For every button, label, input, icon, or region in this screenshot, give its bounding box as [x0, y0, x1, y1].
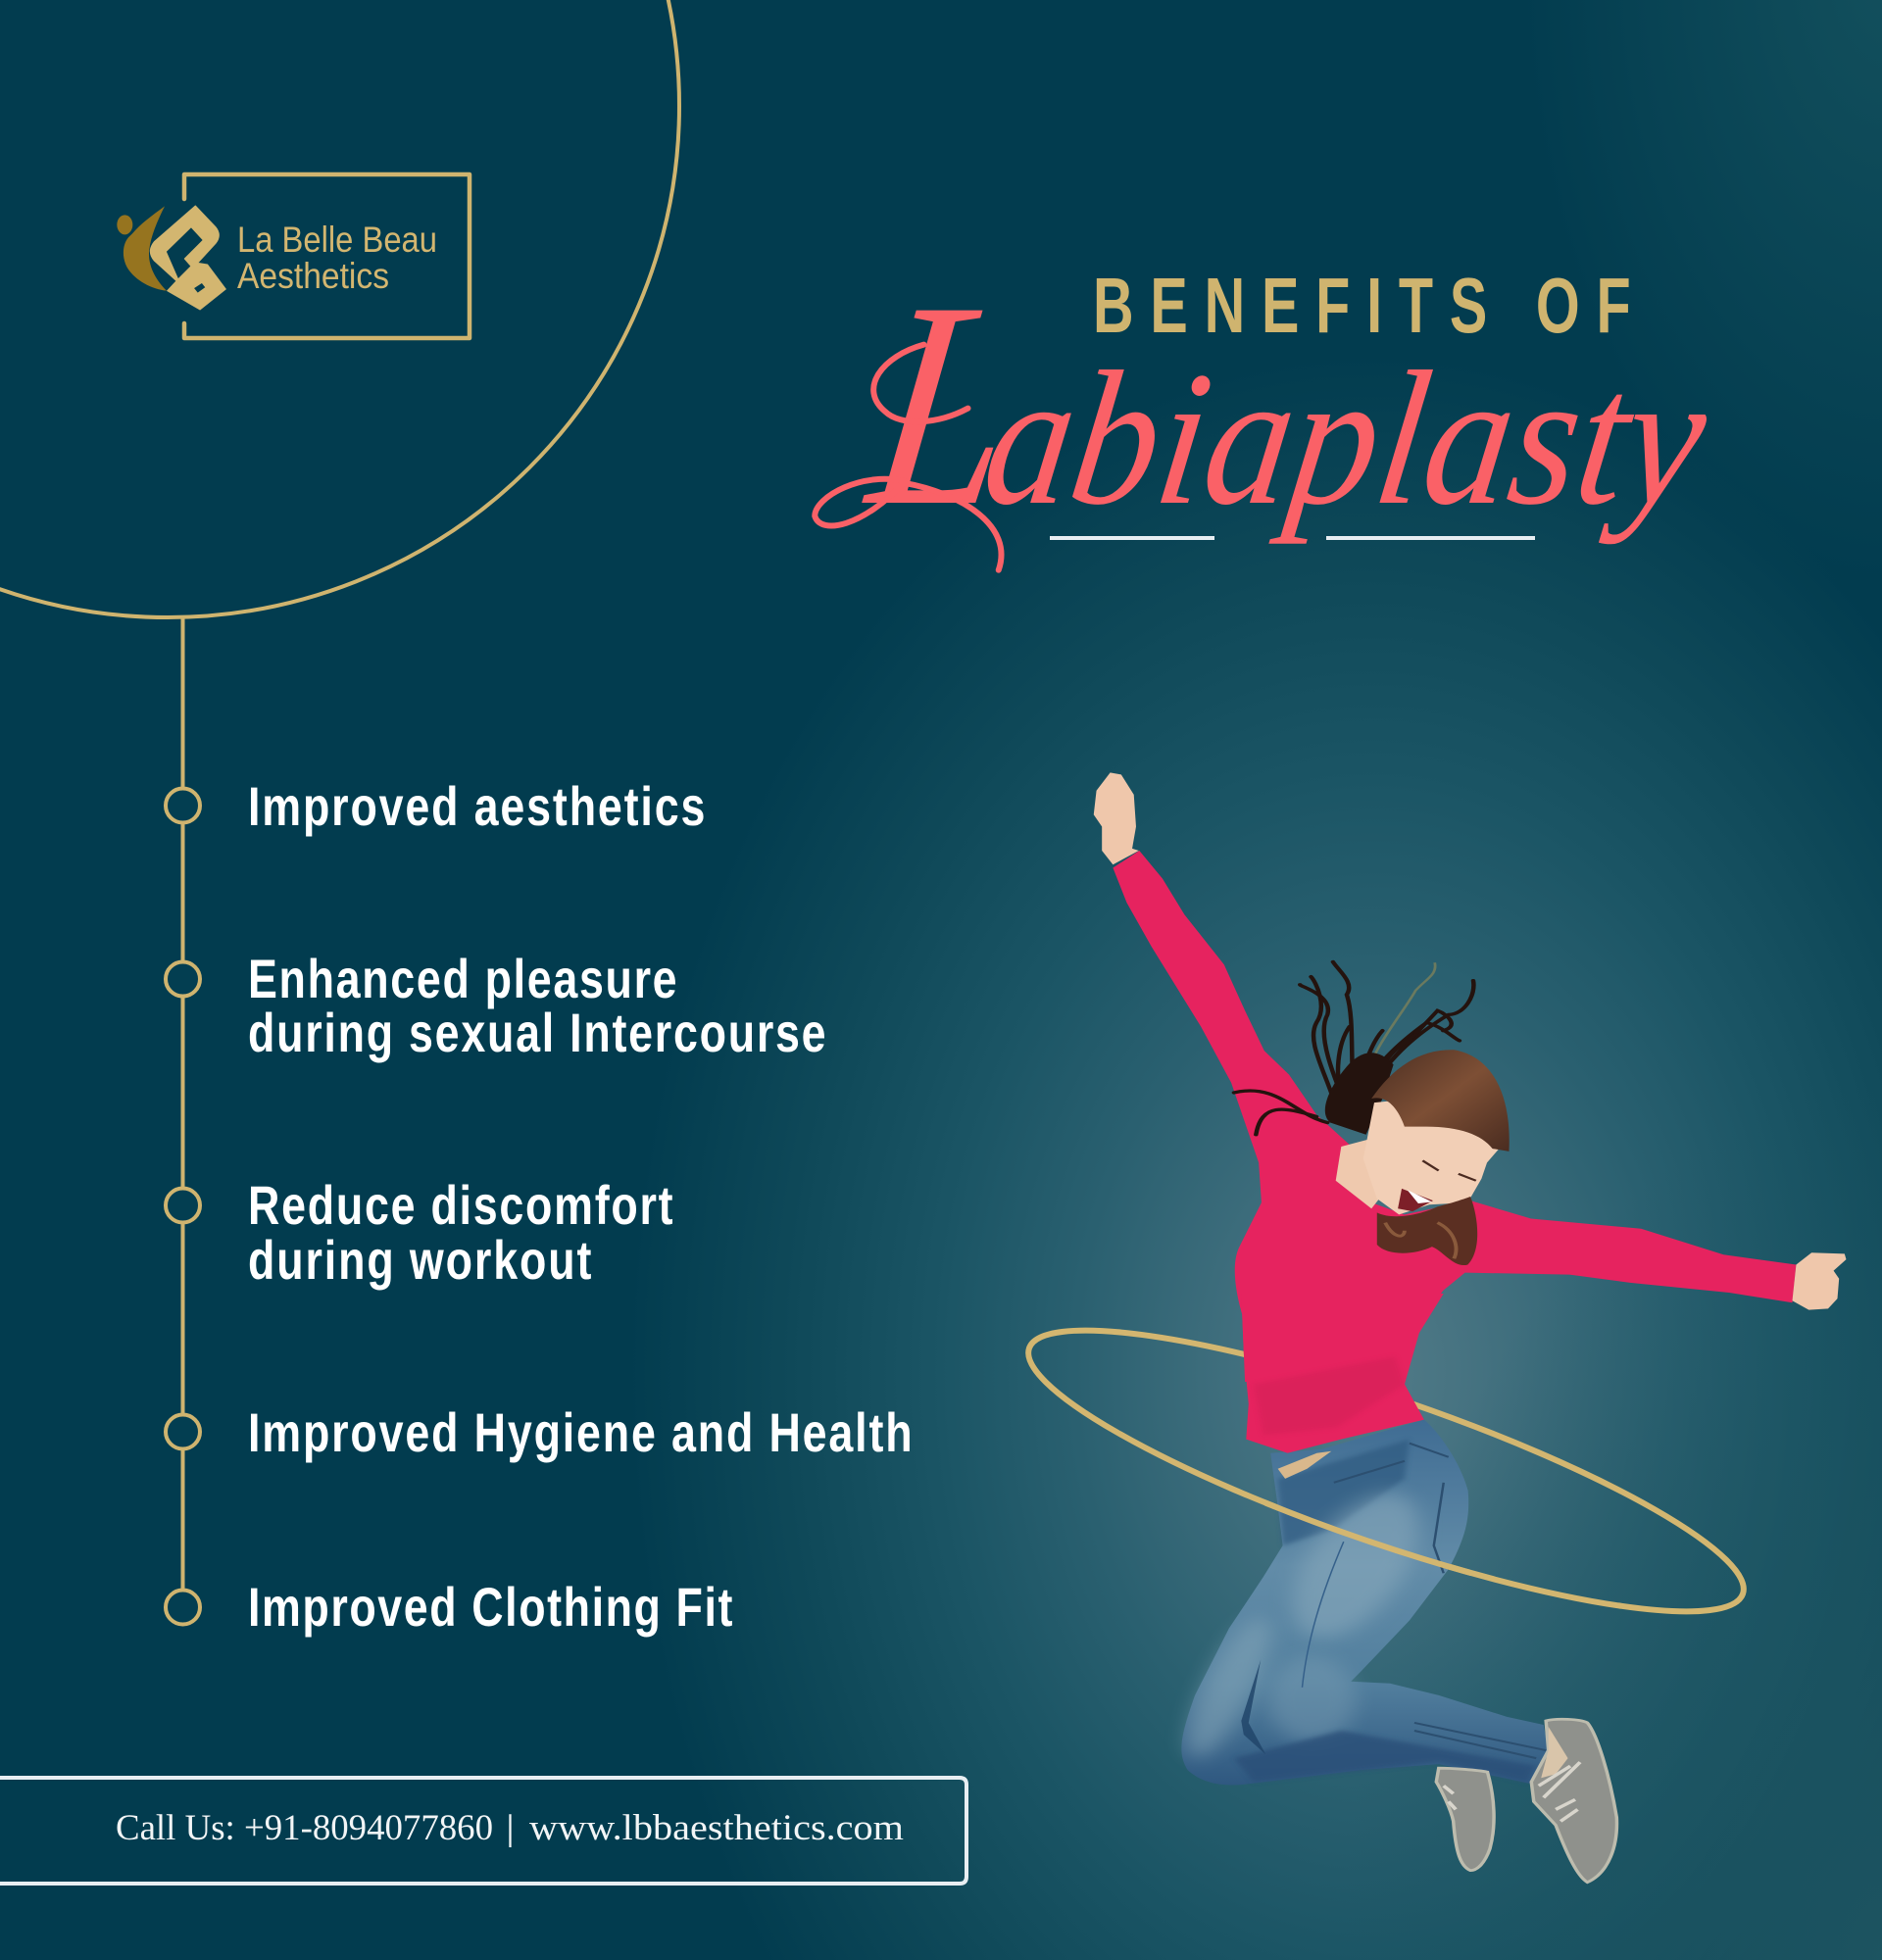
hoop front section over jeans — [1264, 1499, 1470, 1576]
benefit 5: Improved Clothing Fit — [248, 1576, 732, 1638]
contact text: Call Us: +91-8094077860 — [116, 1808, 493, 1848]
hands — [1094, 772, 1846, 1310]
logo — [117, 174, 470, 338]
contact box — [0, 1778, 966, 1884]
large gold circle — [0, 0, 679, 617]
logo wordmark line 1: La Belle Beau — [237, 220, 437, 260]
heading: benefits of: BENEFITS OF — [1093, 262, 1631, 349]
shoes — [1436, 1719, 1616, 1883]
benefit 3: during workout — [248, 1229, 591, 1291]
benefit 3 — [248, 1174, 673, 1291]
title text: L — [852, 241, 1033, 567]
heading: labiaplasty script title — [815, 241, 1732, 570]
benefit 2: Enhanced pleasure — [248, 948, 677, 1009]
white underline right — [1326, 536, 1535, 540]
head and hair — [1234, 961, 1510, 1265]
benefit 1: Improved aesthetics — [248, 775, 705, 837]
sweater — [1113, 851, 1796, 1453]
logo wordmark line 2: Aesthetics — [237, 256, 389, 296]
benefit 3: Reduce discomfort — [248, 1174, 673, 1236]
benefits timeline with gold nodes — [166, 617, 200, 1625]
contact text: www.lbbaesthetics.com — [529, 1808, 904, 1848]
jeans — [1171, 1420, 1549, 1785]
illustration: jumping woman — [1094, 772, 1846, 1883]
logo frame — [184, 174, 470, 338]
white underline left — [1050, 536, 1214, 540]
title text: abiaplasty — [973, 331, 1719, 545]
benefit 2 — [248, 948, 826, 1063]
contact frame — [0, 1778, 966, 1884]
logo icon — [117, 206, 225, 310]
contact text: | — [506, 1808, 515, 1848]
benefit list — [248, 775, 913, 1638]
decorative swash on the title — [815, 345, 1002, 570]
benefit 4: Improved Hygiene and Health — [248, 1401, 913, 1463]
hoop behind figure — [1006, 1280, 1766, 1662]
benefit 2: during sexual Intercourse — [248, 1002, 826, 1063]
